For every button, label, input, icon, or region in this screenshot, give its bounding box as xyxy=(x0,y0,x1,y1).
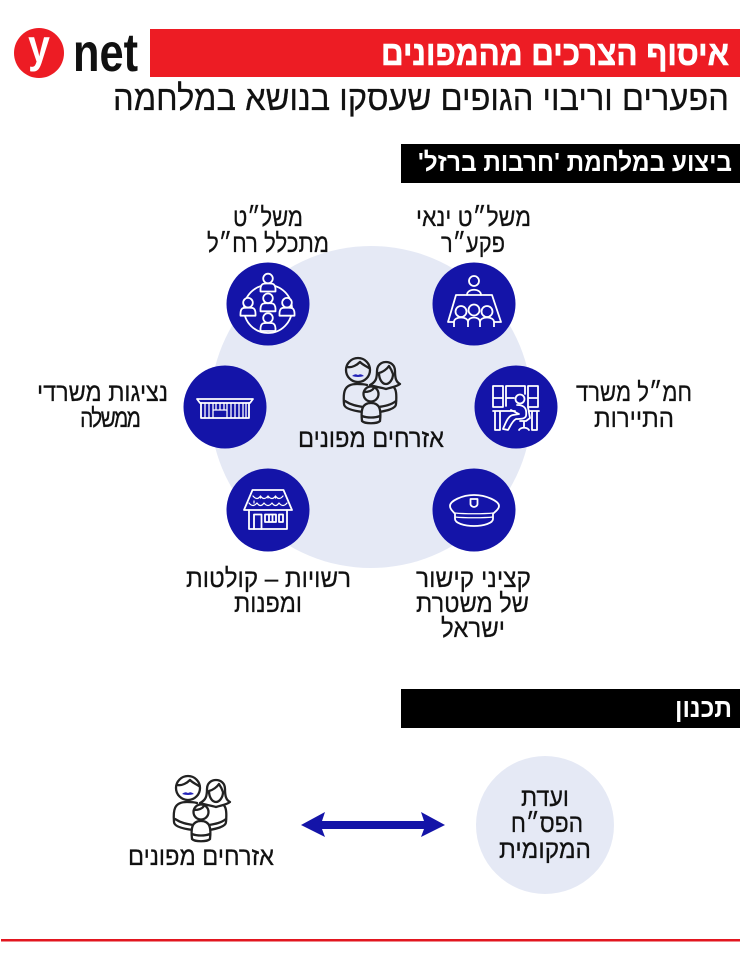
icon: house xyxy=(226,468,310,552)
icon: police cap xyxy=(432,468,516,552)
label: tourism ministry xyxy=(576,377,692,433)
local committee circle: המקומית xyxy=(499,834,591,864)
label: tourism ministry: חמ״ל משרד xyxy=(576,377,692,407)
section heading: planning xyxy=(401,689,740,728)
logo: ynet xyxy=(14,21,138,83)
icon: network of people xyxy=(226,262,310,346)
section heading: planning: תכנון xyxy=(675,693,732,723)
label: displaced citizens (center): אזרחים מפונים xyxy=(298,423,444,453)
label: government ministries xyxy=(37,377,168,433)
background circle xyxy=(210,246,532,568)
double arrow xyxy=(301,812,445,837)
local committee circle: הפס״ח xyxy=(511,810,583,838)
label: police liaison officers: של משטרת xyxy=(416,588,529,618)
title banner xyxy=(150,29,740,77)
icon: operator at desk xyxy=(474,366,558,448)
center icon: displaced family xyxy=(344,358,400,423)
label: Yanai command post: פקע״ר xyxy=(441,228,505,258)
icon: displaced family (planning) xyxy=(174,776,230,841)
icon: Knesset building xyxy=(184,366,266,448)
label: government ministries: נציגות משרדי xyxy=(37,377,168,407)
bottom rule xyxy=(1,939,740,942)
logo: ynet: y xyxy=(28,21,50,73)
label: authorities: ומפנות xyxy=(234,588,302,618)
local committee circle: ועדת xyxy=(521,782,569,812)
label: authorities xyxy=(186,563,351,618)
label: government ministries: ממשלה xyxy=(80,404,141,433)
logo: ynet: net xyxy=(73,23,138,83)
label: displaced citizens (planning): אזרחים מפונים xyxy=(128,841,274,871)
label: police liaison officers: קציני קישור xyxy=(416,563,531,593)
label: authorities: רשויות – קולטות xyxy=(186,563,351,593)
label: tourism ministry: התיירות xyxy=(594,403,674,433)
label: Rachel command post: משל״ט xyxy=(233,202,303,232)
local committee circle xyxy=(476,756,614,894)
label: police liaison officers xyxy=(416,563,531,643)
label: Yanai command post xyxy=(416,202,531,258)
label: Yanai command post: משל״ט ינאי xyxy=(416,202,531,232)
label: Rachel command post xyxy=(207,202,329,258)
label: Rachel command post: מתכלל רח״ל xyxy=(207,228,329,258)
label: police liaison officers: ישראל xyxy=(441,613,505,643)
icon: conference table xyxy=(432,262,516,346)
